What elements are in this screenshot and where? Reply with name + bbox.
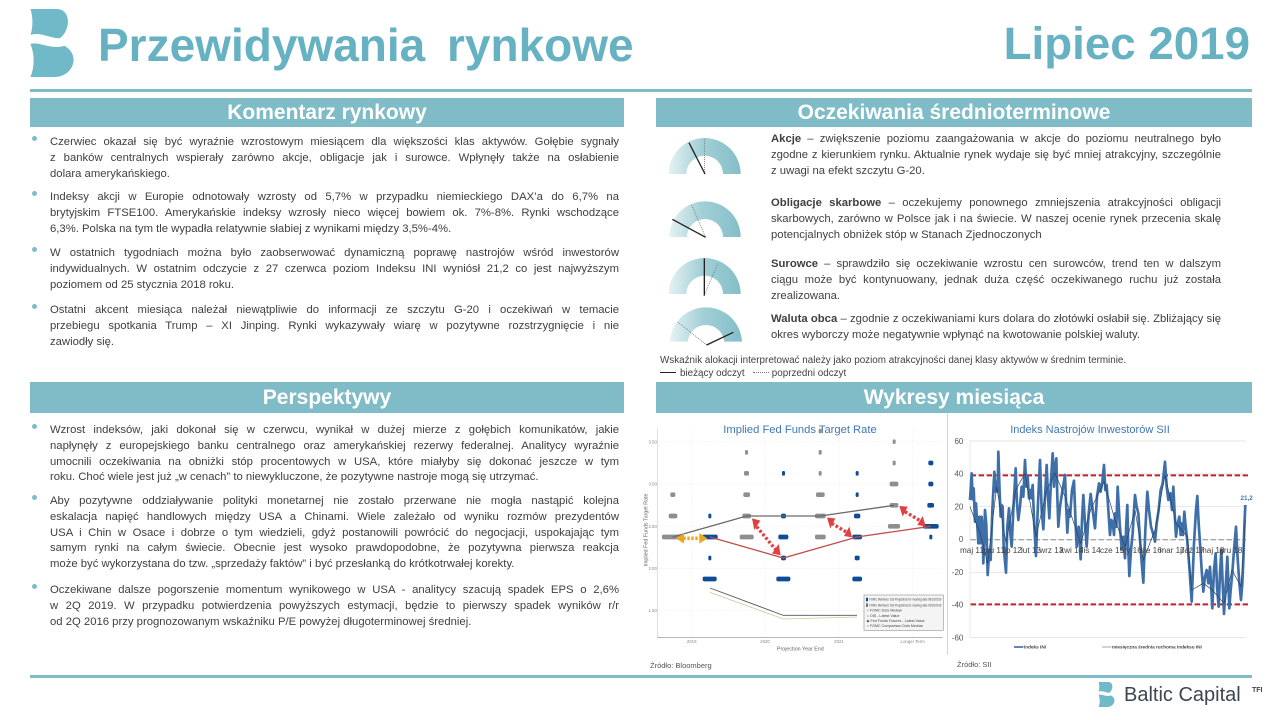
text block: Obligacje skarbowe: potencjalnych obniżek stóp w Stanach Zjednoczonych	[771, 228, 1042, 240]
x axis labels: lis 14	[1082, 546, 1101, 555]
heading: Perspektywy	[30, 382, 624, 413]
arrow: orange spread	[676, 533, 707, 544]
legend note: bieżący odczyt poprzedni odczyt	[680, 368, 846, 379]
chart: Implied Fed Funds Target Rate: Longer Term	[901, 639, 925, 644]
heading: Oczekiwania średnioterminowe: Oczekiwania średnioterminowe	[798, 101, 1110, 124]
arrow: red spread 2020	[752, 518, 781, 555]
x axis labels: lip 12	[1002, 546, 1022, 555]
y axis labels: -60	[952, 634, 964, 643]
text block: paragraph 2: może być wykorzystana do tzw. „sprzedaży faktów” i być przesłanką do krótkotrwałej korekty.	[50, 558, 514, 570]
text block: Akcje: z uwagi na efekt szczytu G-20.	[771, 164, 925, 176]
chart legend	[864, 595, 943, 630]
text block: paragraph 2: Indeksy akcji w Europie odnotowały wzrosty od 5,7% w przypadku niemieckiego DAX’a do 6,7% na	[50, 191, 619, 203]
x axis labels: paź 17	[1180, 546, 1205, 555]
text block: paragraph 3: indywidualnych. W ostatnim odczycie z 27 czerwca poziom Indeksu INI wyniósł 21,2 co jest najwyższym	[50, 263, 619, 275]
text block: paragraph 4: zawiodły się.	[50, 336, 114, 348]
text block: paragraph 1: napłynęły z europejskiego banku centralnego oraz amerykańskiej rezerwy federalnej. Analitycy wyraźnie	[50, 440, 619, 452]
logo: Baltic Capital mark	[30, 9, 74, 77]
text block: Surowce	[771, 258, 1221, 302]
text block: Surowce: ciągu może być kontynuowany, jednak duża część oczekiwanego ruchu już została	[771, 274, 1221, 286]
footer logo: Baltic Capital TFI: TFI	[1252, 687, 1262, 694]
blue projection dots	[702, 461, 939, 581]
gauge: Akcje	[669, 138, 741, 174]
text block: paragraph 1	[32, 136, 619, 180]
chart legend: FOMC Members' Dot Projections for meeting date 06/19/2019	[869, 598, 941, 602]
chart title: Indeks Nastrojów Inwestorów SII: Indeks Nastrojów Inwestorów SII	[1010, 424, 1170, 436]
heading: Perspektywy: Perspektywy	[263, 386, 391, 409]
footer logo: Baltic Capital TFI: Baltic Capital	[1124, 684, 1241, 706]
legend note: Wskaźnik alokacji interpretować należy jako poziom atrakcyjności danej klasy aktywów w średnim terminie.	[660, 355, 1126, 366]
x axis labels	[960, 546, 1243, 555]
text block: Akcje: zgodne z kierunkiem rynku. Aktualnie rynek wydaje się być mniej atrakcyjny, szczególnie	[771, 149, 1221, 161]
chart legend: Indeks INI	[1024, 645, 1046, 650]
reference lines	[971, 475, 1249, 604]
text block: paragraph 3	[32, 247, 619, 290]
gray median line	[673, 505, 894, 537]
chart legend: ○ OIS - Latest Value	[867, 614, 899, 618]
text block: Surowce: zrealizowana.	[771, 290, 840, 302]
chart legend: FOMC Members' Dot Projections for meeting date 03/20/2019	[869, 603, 941, 607]
x axis labels: maj 18	[1200, 546, 1225, 555]
chart legend: ○ FOMC Dots Median	[867, 609, 902, 613]
red median line	[710, 526, 931, 558]
x axis labels: lut 13	[1021, 546, 1041, 555]
gauge: Obligacje skarbowe	[669, 201, 741, 237]
chart: Implied Fed Funds Target Rate: 3.50	[648, 439, 657, 444]
x axis labels: mar 17	[1159, 546, 1185, 555]
x axis labels: gru 11	[982, 546, 1005, 555]
chart legend: ○ FOMC Comparison Dots Median	[867, 624, 923, 628]
source: Bloomberg: Źródło: Bloomberg	[650, 661, 712, 670]
label: latest value: 21,2	[1240, 495, 1253, 502]
text block: paragraph 3: poziomem od 25 stycznia 2018 roku.	[50, 278, 234, 290]
source: SII: Źródło: SII	[957, 660, 992, 669]
chart: Implied Fed Funds Target Rate: 1.50	[648, 608, 657, 613]
text block: paragraph 1: z banków centralnych wspierały zarówno akcje, obligacje jak i surowce. Wpłynęły także na osłabienie	[50, 152, 619, 164]
text block: paragraph 1: umocnili oczekiwania na obniżki stóp procentowych w USA, które miałyby się dokonać jeszcze w tym	[50, 456, 619, 468]
x axis labels: sty 16	[1120, 546, 1142, 555]
text block: paragraph 2: samym rynki na całym świecie. Obecnie jest wysoko prawdopodobne, że pozytywna pierwsza reakcja	[50, 542, 619, 554]
chart: Implied Fed Funds Target Rate: 2021	[834, 639, 844, 644]
date heading: Lipiec 2019	[1004, 18, 1250, 69]
panel: outlook	[30, 382, 624, 628]
footer logo: Baltic Capital TFI	[1098, 682, 1262, 707]
text block: paragraph 2: brytyjskim FTSE100. Amerykańskie indeksy wzrosły nieco więcej bowiem ok. 7%-8%. Rynki wschodzące	[50, 207, 619, 219]
text block: paragraph 2: USA i Chin w Osace i dobrze o tym wiedzieli, gdyż postanowili powrócić do negocjacji, uspokajając tym	[50, 526, 619, 538]
y axis labels: 20	[954, 502, 964, 511]
y axis labels	[952, 437, 964, 643]
x axis labels: gru 18	[1219, 546, 1243, 555]
x axis labels: cze 15	[1100, 546, 1124, 555]
chart title: Implied Fed Funds Target Rate: Implied Fed Funds Target Rate	[723, 424, 877, 436]
INI index line	[970, 452, 1245, 614]
y axis labels: 40	[954, 470, 964, 479]
gauge: Waluta obca	[670, 307, 742, 345]
x axis labels: maj 11	[960, 546, 984, 555]
chart: Implied Fed Funds Target Rate: Projection Year End	[777, 647, 824, 653]
panel: medium-term expectations	[656, 98, 1252, 379]
text block: paragraph 3: Oczekiwane dalsze pogorszenie momentum wynikowego w USA - analitycy szacują spadek EPS o 2,6%	[50, 584, 619, 596]
legend note	[660, 355, 1126, 379]
text block: paragraph 2: 6,3%. Polska na tym tle wypadła relatywnie słabiej z wynikami między 3,5%-4%.	[50, 222, 451, 234]
text block: paragraph 3: od 2Q 2016 przy prognozowanym wskaźniku P/E powyżej długoterminowej średniej.	[50, 616, 471, 628]
gauge: Surowce	[669, 258, 741, 296]
text block: Akcje: Akcje – zwiększenie poziomu zaangażowania w akcje do poziomu neutralnego było	[771, 133, 1221, 145]
heading: Wykresy miesiąca: Wykresy miesiąca	[864, 386, 1044, 409]
text block: paragraph 3: w 2Q 2019. W przypadku potwierdzenia powyższych estymacji, będzie to pierwszy spadek wyników r/r	[50, 600, 619, 612]
x axis labels: kwi 14	[1060, 546, 1084, 555]
gray projection dots	[662, 429, 900, 539]
text block: paragraph 1: Czerwiec okazał się być wyraźnie wzrostowym miesiącem dla większości klas aktywów. Gołębie sygnały	[50, 136, 619, 148]
text block: paragraph 2	[32, 191, 619, 234]
lower rate lines	[710, 588, 857, 619]
text block: Waluta obca	[771, 313, 1221, 341]
panel: market commentary	[30, 98, 624, 348]
y axis labels: 0	[959, 535, 964, 544]
text block: paragraph 3	[32, 584, 619, 628]
arrow: red spread 2021	[827, 518, 852, 537]
text block: paragraph 1	[32, 424, 619, 483]
chart: Implied Fed Funds Target Rate: 2020	[760, 639, 770, 644]
chart legend: ◆ Fed Funds Futures - Latest Value	[867, 619, 925, 623]
chart: Implied Fed Funds Target Rate: 3.00	[648, 482, 657, 487]
text block: Waluta obca: okres wyborczy może negatywnie wpłynąć na kwotowanie polskiej waluty.	[771, 329, 1140, 341]
moving average line	[970, 473, 1245, 603]
arrow: red spread long term	[899, 506, 926, 526]
text block: paragraph 1: roku. Choć wiele jest już „w cenach” to niewykluczone, że pozytywne nastroje mogą się utrzymać.	[50, 471, 538, 483]
text block: Waluta obca: Waluta obca – zgodnie z oczekiwaniami kurs dolara do złotówki osłabił się. Zbliżający się	[771, 313, 1221, 325]
text block: paragraph 2: eskalacja napięć handlowych między USA a Chinami. Wiele zależało od wyniku rozmów prezydentów	[50, 511, 619, 523]
heading: Wykresy miesiąca	[656, 382, 1252, 413]
text block: paragraph 4: Ostatni akcent miesiąca należał niewątpliwie do informacji ze szczytu G-20 i oczekiwań w temacie	[50, 304, 619, 316]
text block: Obligacje skarbowe	[771, 197, 1221, 240]
heading: Komentarz rynkowy	[30, 98, 624, 127]
chart legend	[1014, 645, 1202, 650]
text block: paragraph 4	[32, 304, 619, 348]
text block: Surowce: Surowce – sprawdziło się oczekiwanie wzrostu cen surowców, trend ten w dalszym	[771, 258, 1221, 270]
title: Przewidywania rynkowe	[98, 19, 634, 71]
chart: Implied Fed Funds Target Rate: 2019	[687, 639, 697, 644]
chart: Implied Fed Funds Target Rate: 2.00	[648, 566, 657, 571]
chart: Implied Fed Funds Target Rate: 2.50	[648, 524, 657, 529]
text block: paragraph 3: W ostatnich tygodniach można było zaobserwować dynamiczną poprawę nastrojów wśród inwestorów	[50, 247, 619, 259]
y axis labels: 60	[954, 437, 964, 446]
heading: Oczekiwania średnioterminowe	[656, 98, 1252, 127]
text block: paragraph 1: Wzrost indeksów, jaki dokonał się w czerwcu, wynikał w dużej mierze z gołębich komunikatów, jakie	[50, 424, 619, 436]
chart legend: miesięczna średnia ruchoma Indeksu INI	[1112, 645, 1202, 650]
gauge charts	[668, 138, 742, 346]
heading: Komentarz rynkowy: Komentarz rynkowy	[227, 101, 427, 124]
text block: Obligacje skarbowe: skarbowych, zarówno w Polsce jak i na świecie. W naszej ocenie rynek przecenia skalę	[771, 213, 1221, 225]
text block: paragraph 2: Aby pozytywne oddziaływanie polityki monetarnej nie zostało przerwane nie mogła nastąpić kolejna	[50, 495, 619, 507]
y axis labels: -40	[952, 601, 964, 610]
chart: Implied Fed Funds Target Rate: Implied Fed Funds Target Rate	[643, 493, 649, 567]
text block: Akcje	[771, 133, 1221, 176]
text block: paragraph 4: przebiegu spotkania Trump – XI Jinping. Rynki wykazywały wiarę w pozytywne rozstrzygnięcie i nie	[50, 320, 619, 332]
text block: Obligacje skarbowe: Obligacje skarbowe – oczekujemy ponownego zmniejszenia atrakcyjności obligacji	[771, 197, 1221, 209]
text block: paragraph 1: dolara amerykańskiego.	[50, 168, 170, 180]
x axis labels: sie 16	[1140, 546, 1162, 555]
y axis labels: -20	[952, 568, 964, 577]
x axis labels: wrz 13	[1038, 546, 1064, 555]
text block: paragraph 2	[32, 495, 619, 570]
